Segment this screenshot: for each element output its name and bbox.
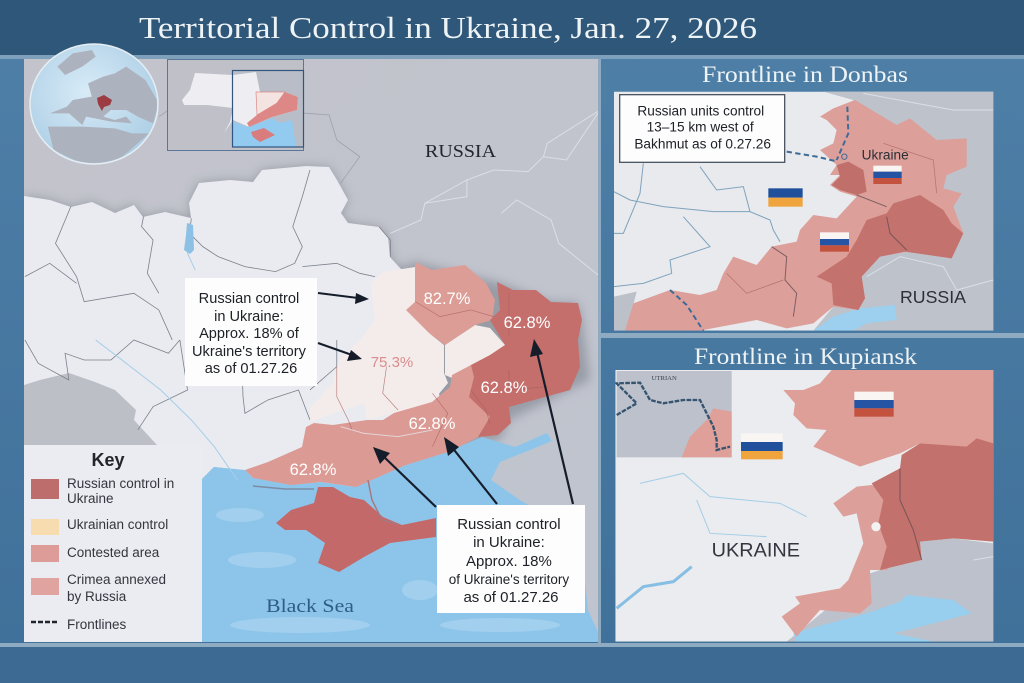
heading: donbas: Frontline in Donbas — [702, 62, 908, 87]
percentage labels: 62.8% — [504, 314, 551, 332]
label: russian control: Russian control in — [67, 476, 174, 491]
footer band — [0, 643, 1024, 683]
percentage labels: 62.8% — [290, 461, 337, 479]
ukrainian-held zone — [310, 267, 448, 422]
percentage labels: 62.8% — [409, 415, 456, 433]
contested north — [783, 370, 993, 467]
frontline dashes — [670, 107, 848, 331]
callout: upper russian control: Russian control — [199, 291, 299, 307]
inset map — [617, 371, 732, 457]
sea shading — [216, 508, 560, 633]
russia land — [787, 538, 993, 642]
russia land — [813, 92, 993, 331]
icon: globe — [30, 44, 159, 165]
label: contested area: Contested area — [67, 545, 160, 560]
inset crimea — [251, 128, 275, 142]
russia label: RUSSIA — [425, 141, 496, 161]
russia lines — [867, 257, 993, 290]
label: frontlines: Frontlines — [67, 617, 127, 632]
black sea — [190, 433, 598, 642]
russia border lines — [159, 100, 600, 277]
callout: upper russian control: Approx. 18% of — [199, 326, 300, 342]
flag: russia south — [820, 232, 849, 252]
panel: donbas map — [614, 92, 993, 331]
moldova and romania — [24, 373, 157, 445]
flag: mixed colours — [741, 433, 783, 459]
title banner: Territorial Control in Ukraine, Jan. 27, 2026 — [139, 10, 757, 45]
callout: upper russian control: Ukraine's territory — [192, 344, 307, 360]
russian control donetsk and luhansk — [469, 282, 582, 437]
contested south — [782, 485, 900, 637]
swatch: contested area — [31, 545, 59, 562]
percentage labels: 82.7% — [424, 290, 471, 308]
russian control east — [872, 438, 993, 570]
label: crimea annexed: by Russia — [67, 589, 127, 604]
oblast borders — [772, 247, 797, 317]
label: ukrainian control: Ukrainian control — [67, 517, 168, 532]
swatch: frontlines — [31, 621, 59, 623]
inset map: UTRIAN — [652, 375, 677, 382]
contested south — [245, 365, 492, 487]
west rivers — [614, 163, 780, 287]
label: ukraine: UKRAINE — [712, 540, 800, 561]
callout: lower russian control: Russian control — [457, 516, 561, 533]
inset cream — [256, 92, 285, 115]
inset ukraine — [182, 72, 298, 133]
black sea label: Black Sea — [266, 596, 355, 617]
panel: kupiansk map — [615, 370, 993, 642]
percentage labels — [290, 290, 551, 479]
swatch: russian control — [31, 479, 59, 499]
border line — [900, 468, 922, 560]
callout: bakhmut: Bakhmut as of 0.27.26 — [634, 136, 771, 151]
occupied oblast borders — [337, 293, 547, 447]
inset locator map — [168, 60, 304, 150]
crimea — [276, 487, 436, 572]
label: ukraine: Ukraine — [862, 147, 909, 162]
flag: russia — [854, 392, 894, 417]
dnieper reservoir — [184, 223, 194, 254]
percentage labels: 62.8% — [481, 379, 528, 397]
callout: upper russian control — [185, 278, 317, 386]
inset sea — [233, 118, 296, 147]
russian control east — [817, 195, 963, 310]
flag: ukraine — [768, 188, 803, 207]
flag: russia north — [873, 166, 902, 184]
ukraine oblast borders — [25, 170, 390, 480]
panel dividers — [598, 59, 1024, 643]
label: crimea annexed: Crimea annexed — [67, 572, 166, 587]
arrows from lower callout — [373, 339, 573, 507]
kerch strait spit — [368, 480, 398, 524]
callout: bakhmut: Russian units control — [637, 103, 764, 118]
russian control pocket — [832, 162, 867, 195]
azov sea — [793, 595, 972, 642]
inset contested — [247, 92, 298, 127]
heading: kupiansk: Frontline in Kupiansk — [694, 344, 918, 369]
legend — [24, 445, 202, 642]
contested area — [625, 100, 967, 331]
title banner — [0, 0, 1024, 59]
percentage labels: 75.3% — [371, 354, 413, 371]
reservoir and rivers — [617, 380, 993, 608]
ukrainian-held pocket — [445, 325, 505, 378]
ukraine land — [24, 166, 440, 500]
callout: upper russian control: as of 01.27.26 — [205, 361, 297, 377]
callout: lower russian control: in Ukraine: — [473, 534, 545, 551]
callout: lower russian control — [437, 505, 585, 613]
label: russian control: Ukraine — [67, 491, 114, 506]
callout: bakhmut: 13–15 km west of — [647, 120, 754, 135]
callout: upper russian control: in Ukraine: — [214, 309, 284, 325]
contested east — [406, 262, 495, 345]
swatch: crimea annexed — [31, 578, 59, 595]
arabat spit — [253, 486, 314, 489]
small sea — [813, 305, 897, 331]
callout: lower russian control: Approx. 18% — [466, 553, 552, 570]
callout: bakhmut — [620, 95, 785, 162]
panel: main map — [24, 59, 600, 642]
label: russia: RUSSIA — [900, 287, 966, 307]
white pocket — [871, 522, 881, 531]
arrows from upper callout — [318, 293, 369, 361]
callout: lower russian control: of Ukraine's territory — [449, 572, 569, 587]
legend: Key — [91, 450, 125, 470]
bottom left corner grey — [614, 292, 637, 331]
swatch: ukrainian control — [31, 519, 59, 535]
callout: lower russian control: as of 01.27.26 — [463, 589, 559, 606]
